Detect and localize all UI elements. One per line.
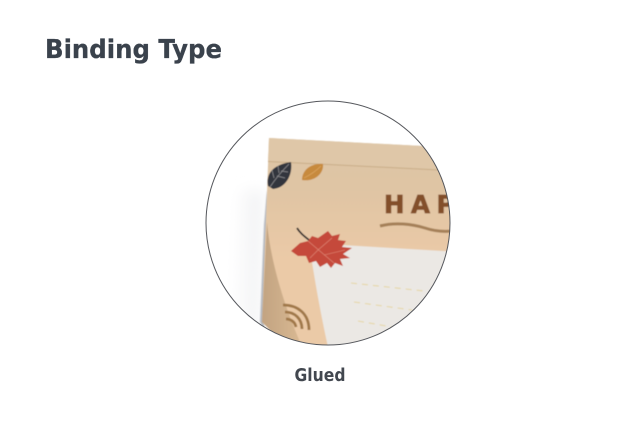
circle interior: calendar photo [250,138,450,344]
squiggle underline [380,224,452,231]
paper body [262,142,450,344]
cast shadow [250,198,260,316]
dashed note lines [351,283,424,327]
grey page edge [260,190,268,330]
top fold [268,153,269,160]
headline fragment: HAP [384,190,461,219]
icon: maple leaf [291,228,352,268]
icon: rainbow arc stamp [283,305,309,330]
product circle [206,101,461,360]
circle outline [206,101,450,345]
icon: orange leaf [302,164,323,180]
curled lower fold [262,222,300,342]
caption: Glued [294,366,346,386]
title: Binding Type [45,35,222,65]
white note card [312,244,446,344]
artwork with slight softness [262,138,450,344]
icon: dark leaf [268,162,291,189]
